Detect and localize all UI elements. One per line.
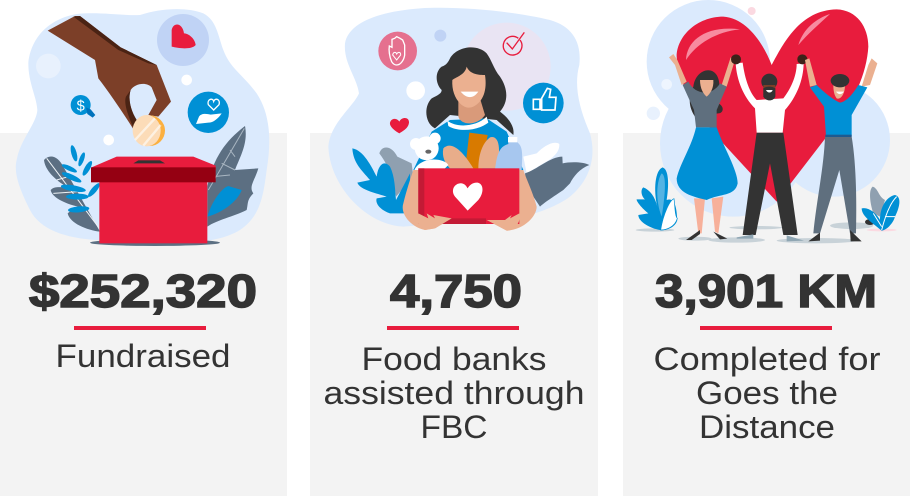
label: Completed for Goes the Distance: Goes the [696,375,838,411]
panel: food banks [310,8,598,496]
label: Fundraised: Fundraised [56,338,230,374]
person: woman in blue skirt [669,54,738,240]
label: Food banks assisted through FBC: FBC [420,409,488,445]
illustration: donation box [16,9,269,246]
label: Completed for Goes the Distance [654,341,881,445]
label: Food banks assisted through FBC: assisted through [324,375,584,411]
label: Completed for Goes the Distance: Completed for [654,341,881,377]
panel: fundraised [0,9,287,496]
stat: 3,901 KM: 3,901 KM [655,265,877,317]
illustration: donation box: $ [77,98,85,114]
person: man in white shirt [731,54,807,241]
panel: goes the distance [623,0,910,496]
illustration: woman with food box [328,8,592,231]
label: Food banks assisted through FBC [324,341,584,445]
stat: $252,320: $252,320 [29,265,257,317]
stat: 4,750: 4,750 [390,265,522,317]
label: Completed for Goes the Distance: Distance [699,409,835,445]
illustration: three people and heart [636,0,899,243]
label: Food banks assisted through FBC: Food banks [362,341,546,377]
person: man in blue shirt [805,58,877,241]
